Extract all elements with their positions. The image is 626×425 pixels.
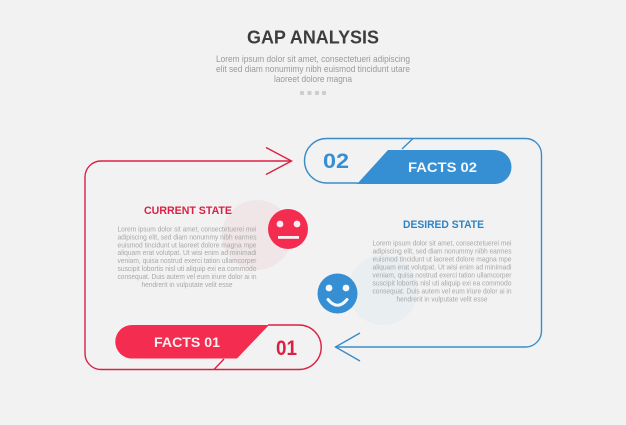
desired state text: aliquam erat volutpat. Ut wisi enim ad minimadi [372,262,512,272]
desired state text: hendrerit in vulputate velit esse [396,294,488,304]
current state text: consequat. Duis autem vel eum iriure dolor ai in [118,272,256,281]
pagination dots [300,91,326,95]
desired state heading: DESIRED STATE [403,219,484,231]
desired state text: consequat. Duis autem vel eum iriure dolor ai in [372,286,512,296]
facts 01 banner [115,325,269,358]
icon: neutral face [268,209,308,249]
number 02: 02 [323,150,349,173]
desired state text [372,238,512,304]
current state text: veniam, quisa nostrud exerci tation ullamcorper [118,256,257,265]
subtitle text: Lorem ipsum dolor sit amet, consectetueri adipiscing [216,54,410,64]
current state text: Lorem ipsum dolor sit amet, consectetuerei mei [118,224,257,234]
current state heading: CURRENT STATE [144,205,232,217]
icon: smiling face [318,274,358,314]
current state text: aliquam erat volutpat. Ut wisi enim ad minimadi [118,248,257,257]
current state text: euismod tincidunt ut laoreet dolore magna mpe [118,240,256,249]
subtitle text: elit sed diam nonumimy nibh euismod tincidunt utare [216,64,410,74]
desired state text: adipiscing elit, sed diam nonummy nibh earmes [372,246,512,256]
current state text [118,224,257,289]
subtitle text: laoreet dolore magna [274,74,353,84]
facts 02 banner: FACTS 02 [408,160,477,175]
number 01: 01 [276,337,297,360]
facts 01 banner: FACTS 01 [154,335,221,350]
background circle: desired state [348,255,418,325]
desired state text: veniam, quisa nostrud exerci tation ullamcorper [372,270,512,280]
current state text: adipiscing elit, sed diam nonummy nibh earmes [118,232,257,241]
current state text: hendrerit in vulputate velit esse [142,280,232,289]
current state text: suscipit lobortis nisl uti aliquip exi ea commodo [118,264,256,273]
desired state text: Lorem ipsum dolor sit amet, consectetuerei mei [372,238,512,248]
blue flow outline with arrow [304,138,542,361]
facts 02 banner [357,150,512,184]
subtitle text [216,54,410,84]
title: GAP ANALYSIS [247,26,379,48]
desired state text: euismod tincidunt ut laoreet dolore magna mpe [372,254,512,264]
desired state text: suscipit lobortis nisl uti aliquip exi ea commodo [372,278,512,288]
background circle: current state [222,200,292,270]
red flow outline with arrow [85,148,321,370]
